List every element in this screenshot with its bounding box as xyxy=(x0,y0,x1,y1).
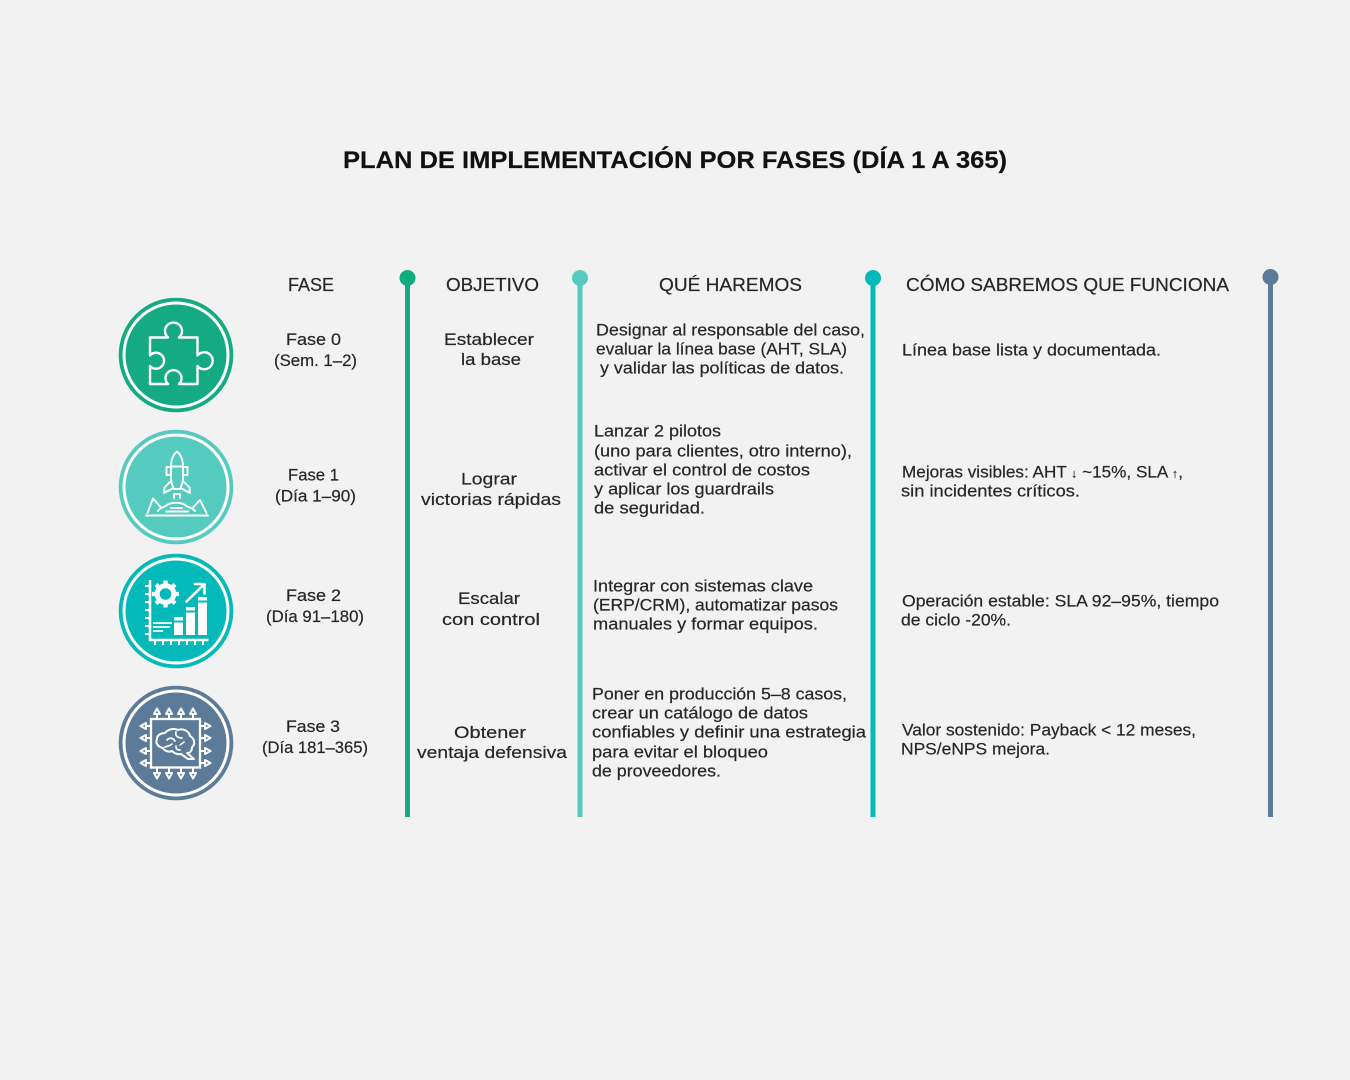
divider line: slate xyxy=(1262,269,1278,817)
phase label xyxy=(274,330,357,370)
actions: Designar al responsable del caso, xyxy=(596,321,865,340)
actions: confiables y definir una estrategia xyxy=(592,723,867,742)
objective: con control xyxy=(442,610,540,629)
actions: crear un catálogo de datos xyxy=(592,704,808,723)
icon: brain on chip xyxy=(119,686,233,800)
objective: Establecer xyxy=(444,330,534,349)
success metric: NPS/eNPS mejora. xyxy=(901,740,1050,759)
success metric: Línea base lista y documentada. xyxy=(902,341,1161,360)
success metric xyxy=(901,721,1196,759)
title: PLAN DE IMPLEMENTACIÓN POR FASES (DÍA 1 A 365) xyxy=(343,146,1007,174)
actions xyxy=(594,422,852,518)
divider line: green xyxy=(400,270,416,817)
phase label: Fase 2 xyxy=(286,586,341,605)
actions: (ERP/CRM), automatizar pasos xyxy=(593,596,838,615)
actions: de proveedores. xyxy=(592,762,721,781)
icon: growth chart with gear xyxy=(119,554,233,668)
objective: la base xyxy=(461,350,521,369)
success metric: Operación estable: SLA 92–95%, tiempo xyxy=(902,592,1219,611)
header: cómo sabremos que funciona: CÓMO SABREMOS QUE FUNCIONA xyxy=(906,274,1230,295)
divider line: aqua xyxy=(572,270,588,817)
phase label: (Día 181–365) xyxy=(262,738,368,757)
objective: Lograr xyxy=(461,470,517,488)
phase label xyxy=(262,717,368,757)
actions: (uno para clientes, otro interno), xyxy=(594,442,852,461)
success metric: Mejoras visibles: AHT ↓ ~15%, SLA ↑, xyxy=(902,463,1183,482)
objective xyxy=(421,470,561,509)
header: fase: FASE xyxy=(288,274,334,295)
actions xyxy=(596,321,865,378)
divider line: teal xyxy=(865,270,881,817)
actions xyxy=(593,577,838,634)
actions: y validar las políticas de datos. xyxy=(600,359,844,378)
phase label: (Día 1–90) xyxy=(275,486,356,506)
row: fase 1 xyxy=(119,422,1183,544)
objective: victorias rápidas xyxy=(421,490,561,509)
objective xyxy=(444,330,534,369)
column headers xyxy=(288,274,1230,295)
actions: Poner en producción 5–8 casos, xyxy=(592,685,847,704)
phase label: (Día 91–180) xyxy=(266,607,364,626)
actions: y aplicar los guardrails xyxy=(594,480,774,499)
actions xyxy=(592,685,867,781)
actions: Integrar con sistemas clave xyxy=(593,577,813,596)
header: qué haremos: QUÉ HAREMOS xyxy=(659,274,802,295)
header: objetivo: OBJETIVO xyxy=(446,274,539,295)
objective xyxy=(417,723,568,762)
phase label: Fase 3 xyxy=(286,717,340,736)
success metric: de ciclo -20%. xyxy=(901,611,1011,630)
icon: rocket launch xyxy=(119,430,233,544)
actions: para evitar el bloqueo xyxy=(592,743,768,762)
phase label xyxy=(266,586,364,626)
phase label: (Sem. 1–2) xyxy=(274,351,357,370)
actions: Lanzar 2 pilotos xyxy=(594,422,721,441)
objective: Escalar xyxy=(458,589,520,608)
success metric: Valor sostenido: Payback < 12 meses, xyxy=(902,721,1196,740)
objective: Obtener xyxy=(454,723,526,742)
phase label: Fase 0 xyxy=(286,330,341,349)
row: fase 3 xyxy=(119,685,1196,800)
objective xyxy=(442,589,540,629)
objective: ventaja defensiva xyxy=(417,743,568,762)
actions: activar el control de costos xyxy=(594,461,810,480)
success metric xyxy=(901,592,1219,630)
actions: de seguridad. xyxy=(594,499,705,518)
phase label xyxy=(275,466,356,506)
icon: puzzle piece xyxy=(119,298,233,412)
actions: manuales y formar equipos. xyxy=(593,615,818,634)
actions: evaluar la línea base (AHT, SLA) xyxy=(596,340,847,359)
phase label: Fase 1 xyxy=(288,466,339,484)
row: fase 0 xyxy=(119,298,1161,412)
success metric xyxy=(901,463,1183,501)
success metric: sin incidentes críticos. xyxy=(901,482,1080,501)
row: fase 2 xyxy=(119,554,1219,668)
